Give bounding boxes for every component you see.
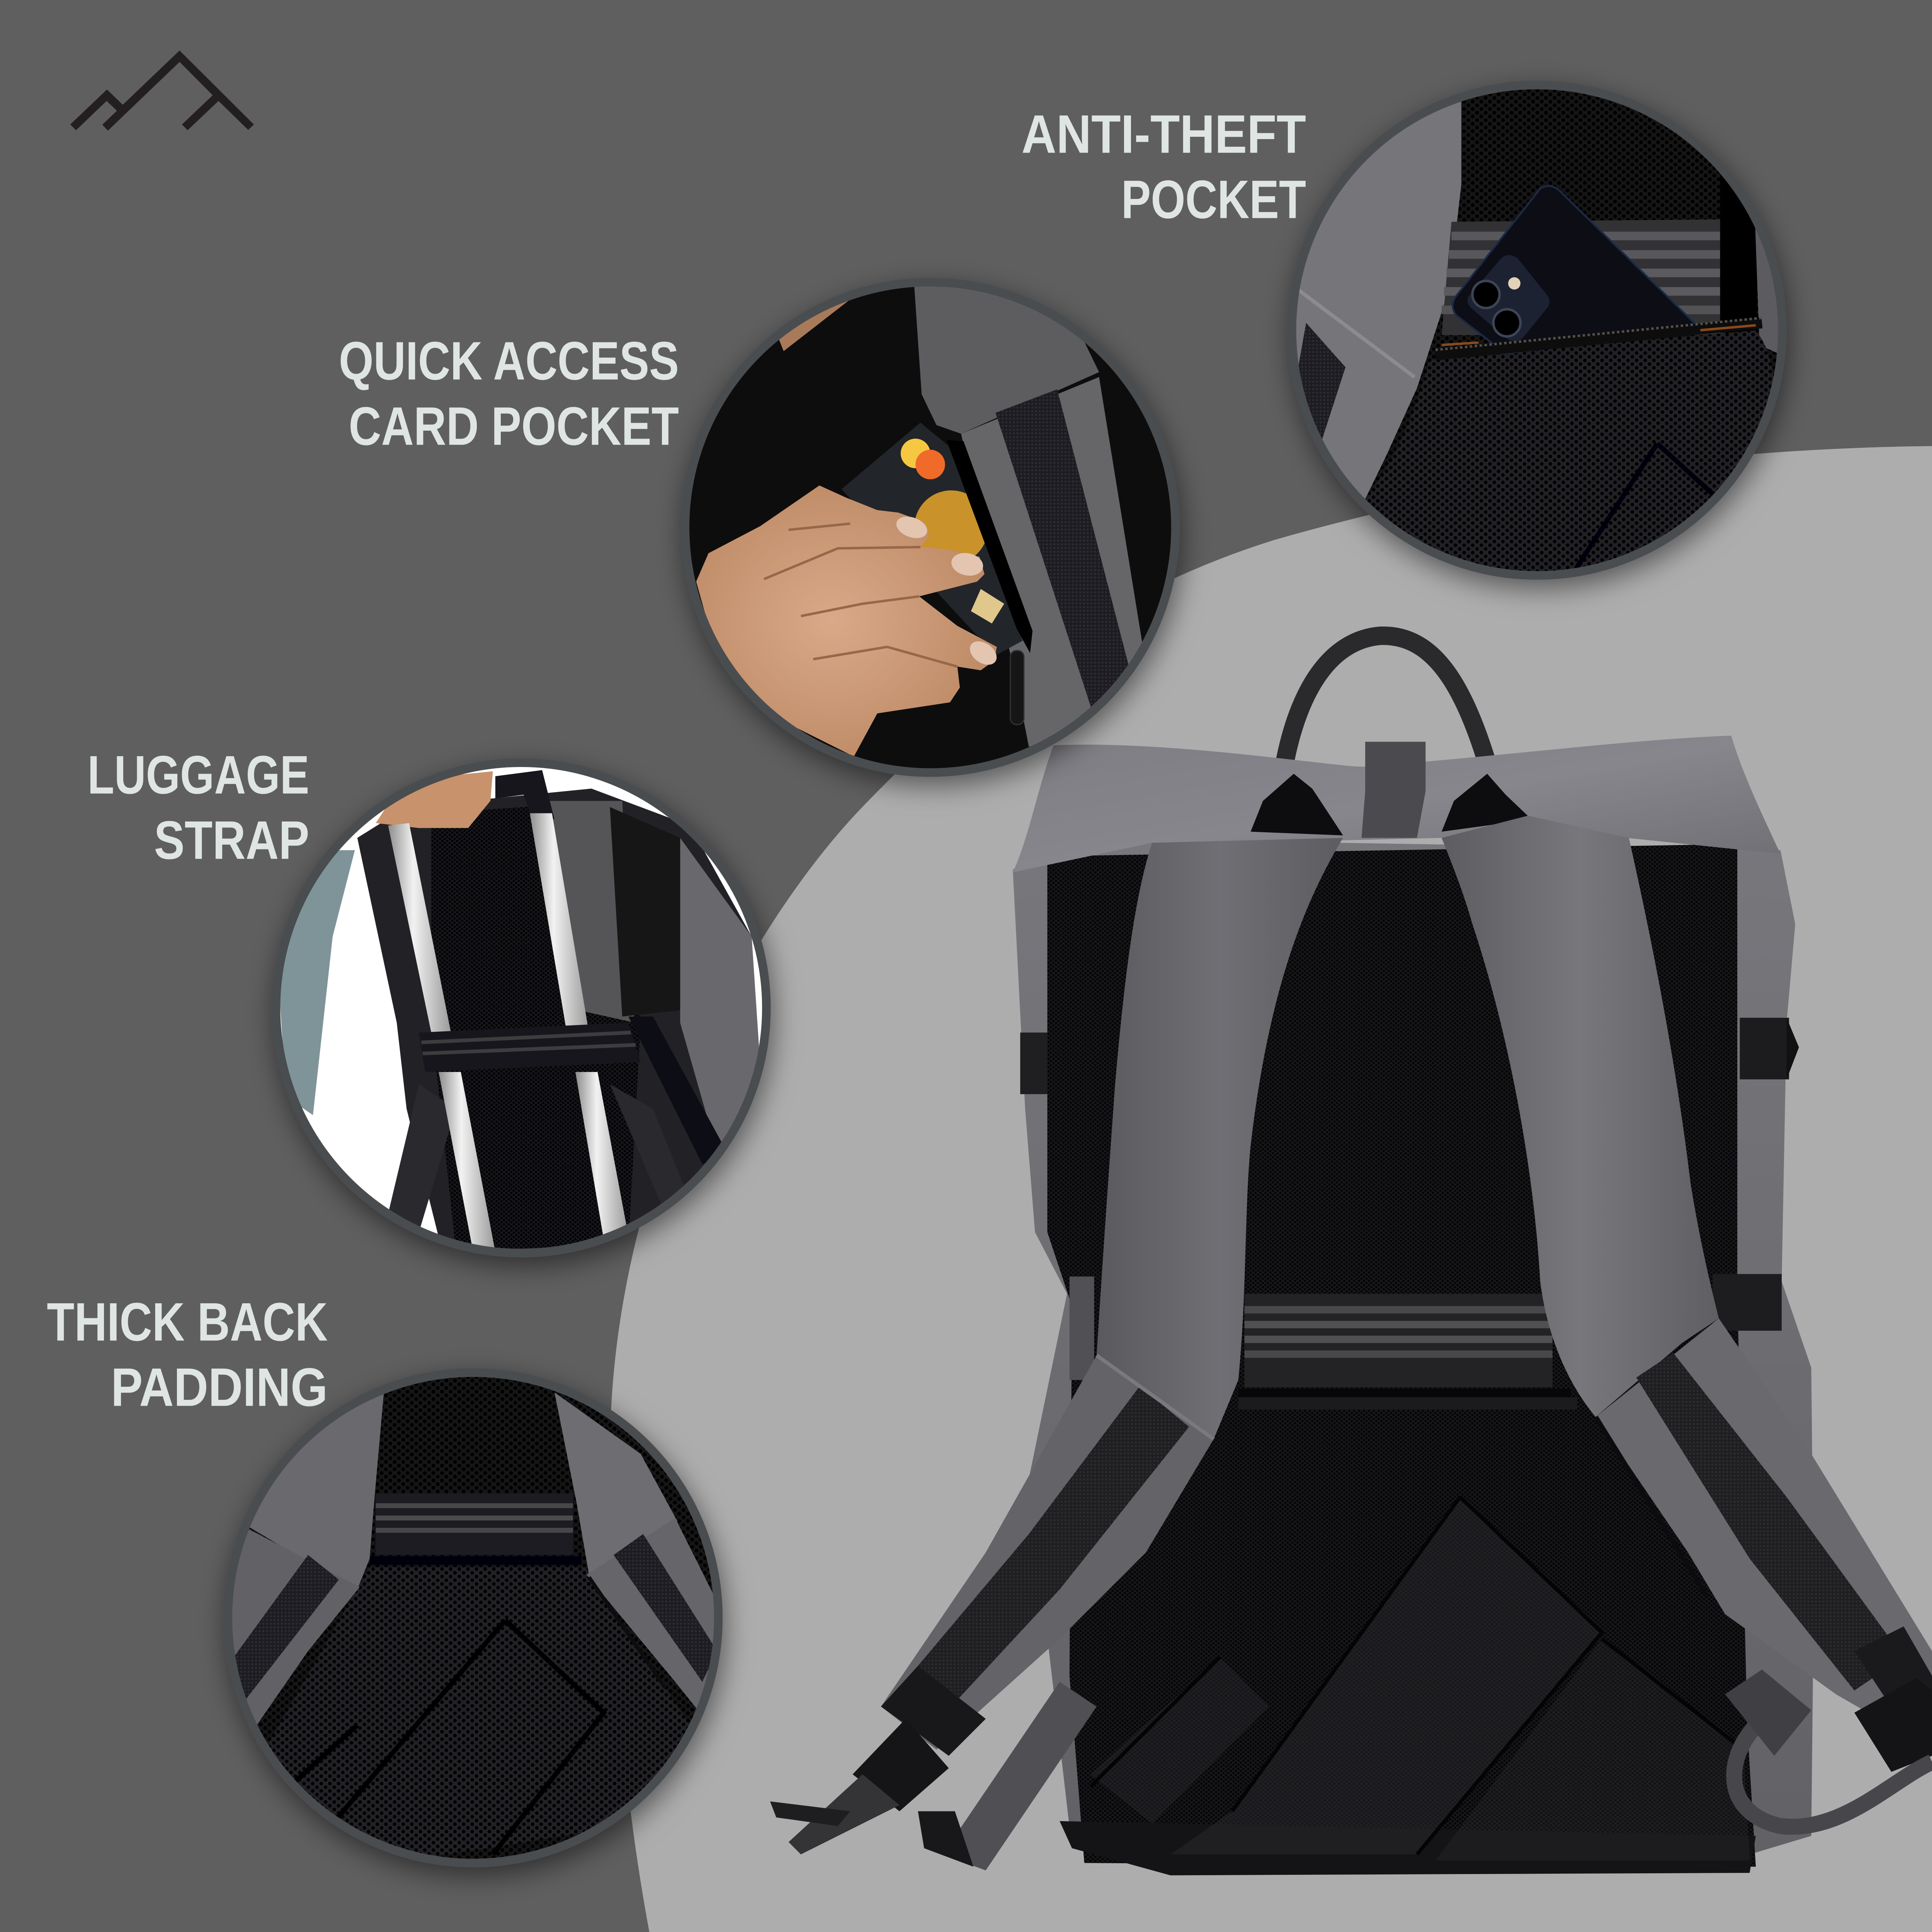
backpack photo — [770, 636, 1932, 1875]
left grey strap lower — [224, 1528, 360, 1731]
ring — [228, 1372, 718, 1863]
mesh background — [222, 1368, 727, 1873]
backpack: waist webbing band — [1238, 1294, 1577, 1410]
backpack body — [357, 789, 762, 1257]
heading: anti-theft pocket — [1021, 104, 1306, 230]
backpack: left buckle and loose straps — [770, 1682, 1097, 1871]
backpack: side straps and buckles — [1020, 1018, 1799, 1380]
hand — [696, 485, 1001, 757]
webbing band — [370, 1493, 582, 1565]
heading: thick back padding — [47, 1291, 328, 1417]
backpack: right buckle and loose strap — [1725, 1670, 1932, 1827]
chevron folds — [289, 1620, 604, 1854]
panel: luggage strap circle photo — [271, 758, 776, 1263]
neck skin — [776, 296, 850, 351]
heading: quick access card pocket: CARD POCKET — [349, 396, 679, 456]
panel: anti-theft pocket circle photo — [1281, 74, 1799, 592]
side dark strap — [610, 807, 680, 1017]
strap seam — [1296, 288, 1415, 377]
heading: anti-theft pocket: POCKET — [1121, 169, 1306, 230]
mesh fold — [1577, 444, 1725, 579]
fingernails — [893, 513, 1001, 670]
backpack: right lower strap — [1595, 1318, 1932, 1750]
right grey strap lower — [587, 1518, 717, 1719]
panel: quick access card pocket circle photo — [678, 277, 1183, 782]
lower straps — [388, 1017, 727, 1232]
heading: luggage strap — [87, 745, 309, 871]
card — [842, 423, 1023, 655]
heading: luggage strap: LUGGAGE — [87, 745, 309, 805]
phone — [1453, 186, 1698, 354]
trolley poles lower — [439, 1072, 628, 1252]
black shirt — [678, 277, 1183, 782]
ring — [685, 282, 1175, 772]
backpack: top handle — [1278, 636, 1500, 813]
heading: thick back padding: THICK BACK — [47, 1291, 328, 1352]
right grey strap upper — [554, 1392, 678, 1575]
logo: mountain peaks — [70, 51, 254, 131]
ring — [276, 763, 766, 1253]
grey shoulder fabric — [914, 286, 1099, 434]
phone camera module — [1468, 255, 1549, 341]
heading: luggage strap: STRAP — [154, 810, 309, 871]
phone lenses — [1473, 277, 1520, 337]
background: light curved panel — [610, 446, 1932, 1932]
panel: thick back padding circle photo — [222, 1368, 727, 1873]
backpack: right shoulder pad — [1442, 816, 1719, 1417]
gold disco ball — [914, 490, 988, 564]
heading: quick access card pocket — [339, 330, 679, 456]
ring — [1292, 85, 1782, 575]
grey shoulder strap — [1281, 99, 1461, 499]
luggage strap band — [419, 1023, 641, 1072]
trolley handle — [495, 770, 554, 820]
right side fabric — [1755, 209, 1789, 357]
backpack: left shoulder pad — [1097, 838, 1343, 1439]
white backdrop — [271, 758, 776, 1263]
zipper tape — [946, 440, 1032, 653]
backpack: left lower strap — [881, 1355, 1214, 1756]
finger creases — [764, 524, 957, 667]
mesh background — [1365, 89, 1777, 499]
seam and dark strap webbing — [1291, 323, 1345, 458]
hand — [376, 771, 493, 828]
backpack: lower mesh chevron panels — [1090, 1497, 1750, 1861]
lower mesh pocket — [1355, 330, 1774, 592]
right grey body — [680, 838, 762, 1152]
backpack: top roll flap — [1013, 736, 1781, 872]
zipper — [1435, 318, 1762, 355]
backpack: side and lower body — [1013, 838, 1814, 1854]
backpack: base — [1060, 1821, 1756, 1875]
backpack: handle anchors — [1251, 774, 1532, 835]
heading: thick back padding: PADDING — [111, 1357, 328, 1417]
jeans — [276, 850, 355, 1115]
dark strap webbing — [996, 389, 1129, 717]
lower mesh padding — [265, 1567, 690, 1867]
grey strap — [961, 377, 1146, 747]
heading: anti-theft pocket: ANTI-THEFT — [1021, 104, 1306, 164]
webbing band — [1442, 219, 1725, 335]
heading: quick access card pocket: QUICK ACCESS — [339, 330, 679, 391]
backpack: mesh back panel — [1047, 844, 1756, 1867]
left grey strap upper — [240, 1386, 384, 1590]
mesh centre — [431, 801, 641, 1251]
grey shoulder strap — [542, 801, 634, 1023]
mastercard circles — [901, 439, 930, 468]
dark shadow right — [1720, 160, 1757, 333]
zipper pull — [1010, 651, 1024, 724]
backpack: center tab — [1362, 742, 1425, 838]
trolley poles upper — [388, 813, 589, 1032]
chip — [971, 589, 1004, 624]
